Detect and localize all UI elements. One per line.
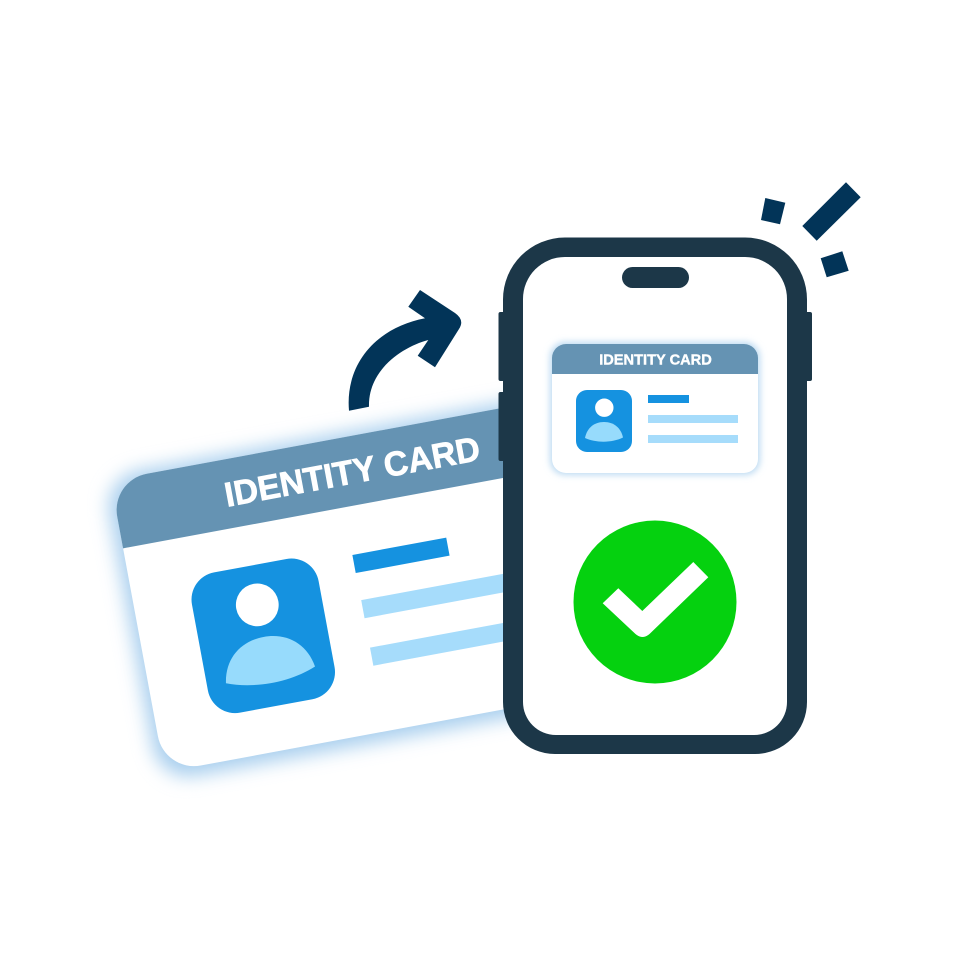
small card body xyxy=(552,344,758,473)
card header band xyxy=(110,394,589,548)
icon: small profile photo xyxy=(576,390,632,452)
identity card: large tilted card xyxy=(103,388,639,783)
identity card: small card on phone screen xyxy=(550,342,760,475)
icon: green verified check xyxy=(574,520,736,684)
card glow xyxy=(103,388,639,783)
icon: profile photo xyxy=(187,554,340,718)
phone notch xyxy=(622,267,689,288)
card heading: IDENTITY CARD xyxy=(221,430,483,515)
text placeholder lines xyxy=(352,517,577,666)
spark lines xyxy=(761,182,861,277)
small text placeholder lines xyxy=(648,395,738,443)
small card heading: IDENTITY CARD xyxy=(599,352,712,368)
small card glow xyxy=(550,342,760,475)
small card header band xyxy=(552,344,758,374)
arrow: curved arrow from card to phone xyxy=(349,290,461,411)
phone: body and screen xyxy=(503,238,807,754)
card body xyxy=(110,394,630,772)
phone side buttons xyxy=(498,312,812,461)
